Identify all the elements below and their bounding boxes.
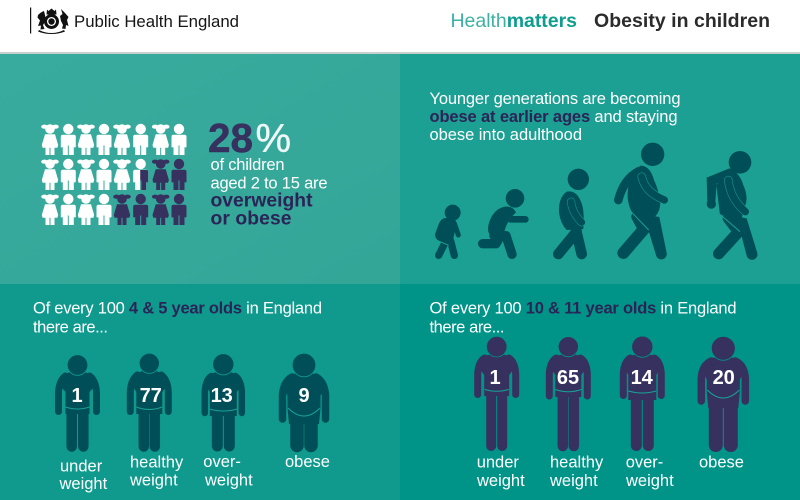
figure: elderly adult [707, 151, 757, 260]
figure: obese, 9: 9 [298, 385, 310, 407]
figure: under weight, 1: 1 [71, 385, 83, 407]
figure: overweight, 13 [203, 354, 253, 490]
figure: overweight, 14: over- [626, 453, 663, 471]
panel: younger generations [400, 54, 800, 284]
figure: under weight, 1 [476, 336, 525, 490]
panel heading [430, 299, 736, 336]
figure: under weight, 1: under [477, 453, 519, 471]
illustration: life stages [435, 143, 757, 260]
panel: 28% of children [0, 54, 400, 284]
figure: overweight, 14 [623, 336, 674, 490]
panel: 4 and 5 year olds [0, 284, 400, 500]
page title: Obesity in children: Obesity in children [594, 10, 770, 32]
figure: obese, 20: 20 [713, 367, 735, 389]
statistic caption: of children [210, 156, 284, 174]
statistic caption [210, 156, 328, 229]
figure: healthy weight, 65: weight [549, 472, 598, 490]
figure: healthy weight, 65 [549, 337, 604, 490]
figure: obese, 20 [699, 336, 745, 471]
panel heading [33, 299, 322, 336]
panel heading: Of every 100 4 & 5 year olds in England [33, 299, 322, 317]
panel text: obese into adulthood [430, 126, 582, 144]
figure: obese adult [618, 143, 667, 259]
statistic caption: or obese [210, 208, 292, 229]
figure: healthy weight, 77 [129, 353, 184, 490]
figure: healthy weight, 65: healthy [550, 453, 604, 471]
panel text [430, 90, 680, 144]
figure: overweight, 14: weight [625, 472, 674, 490]
series title: Healthmatters: Healthmatters [450, 10, 577, 32]
figure: under weight, 1: 1 [489, 367, 501, 389]
figure: healthy weight, 77: 77 [140, 385, 162, 407]
panel text: Younger generations are becoming [430, 90, 680, 108]
figure: overweight, 13: weight [204, 472, 253, 490]
figure: under weight, 1: weight [58, 475, 108, 493]
figure: under weight, 1 [58, 355, 108, 493]
statistic: 28%: % [256, 117, 291, 161]
logo: Public Health England [30, 8, 239, 34]
figure: obese, 20: obese [699, 453, 744, 471]
figure: crawling child [483, 189, 525, 254]
figure: toddler [435, 205, 461, 255]
panel text: obese at earlier ages and staying [430, 108, 678, 126]
statistic caption: aged 2 to 15 are [210, 174, 328, 192]
figure: overweight, 13: 13 [211, 385, 233, 407]
icon: royal crest [38, 8, 68, 34]
pictogram: 24 children [41, 124, 187, 225]
figure: obese, 9 [282, 353, 330, 471]
logo wordmark: Public Health England [74, 12, 239, 31]
panel heading: there are... [33, 318, 108, 336]
panel heading: there are... [430, 318, 504, 336]
statistic: 28% [208, 115, 291, 161]
figure: overweight, 13: over- [203, 453, 241, 471]
header bar [0, 0, 800, 54]
figure: healthy weight, 65: 65 [557, 367, 579, 389]
statistic: 28%: 28 [208, 115, 253, 161]
statistic caption: overweight [210, 191, 313, 212]
figure: under weight, 1: weight [476, 472, 525, 490]
figure: child [558, 169, 589, 254]
figure: obese, 9: obese [285, 453, 330, 471]
figure: healthy weight, 77: healthy [130, 454, 184, 472]
figure: overweight, 14: 14 [631, 367, 654, 389]
panel: 10 and 11 year olds [400, 284, 800, 500]
figure: healthy weight, 77: weight [129, 472, 178, 490]
panel heading: Of every 100 10 & 11 year olds in England [430, 299, 736, 317]
figure: under weight, 1: under [60, 458, 103, 476]
